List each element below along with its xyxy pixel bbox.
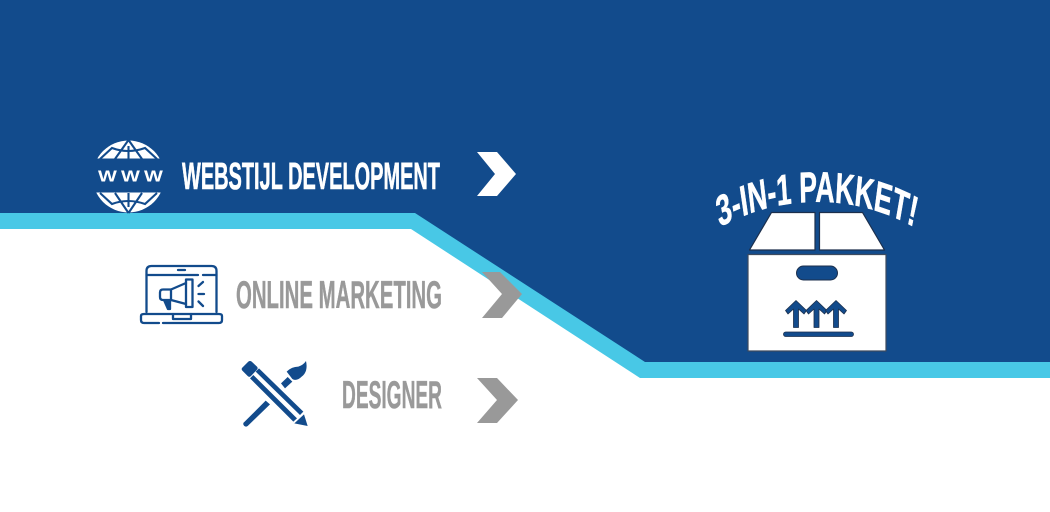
arrow: white chevron — [477, 152, 516, 196]
box left flap — [750, 212, 815, 250]
icon: laptop with megaphone — [141, 266, 222, 323]
panel: blue top area — [0, 0, 1050, 363]
arrow: gray chevron marketing — [482, 272, 522, 318]
box handle — [796, 266, 838, 280]
heading: 3-in-1 pakket curved: 3-IN-1 PAKKET! — [716, 172, 918, 226]
box body — [748, 254, 886, 351]
cyan diagonal band — [0, 213, 1050, 378]
heading: Webstijl Development: WEBSTIJL DEVELOPMENT — [182, 156, 440, 198]
box base line — [784, 332, 854, 336]
heading: Online Marketing: ONLINE MARKETING — [236, 274, 442, 317]
box up arrows — [786, 300, 846, 328]
icon: www globe: WWW — [98, 167, 164, 185]
box right flap — [820, 212, 884, 250]
icon: cardboard box — [748, 212, 886, 351]
icon: pencil and brush — [242, 361, 308, 427]
arrow: gray chevron designer — [477, 378, 518, 423]
text: DESIGNER — [342, 374, 442, 417]
icon: www globe — [92, 140, 164, 213]
